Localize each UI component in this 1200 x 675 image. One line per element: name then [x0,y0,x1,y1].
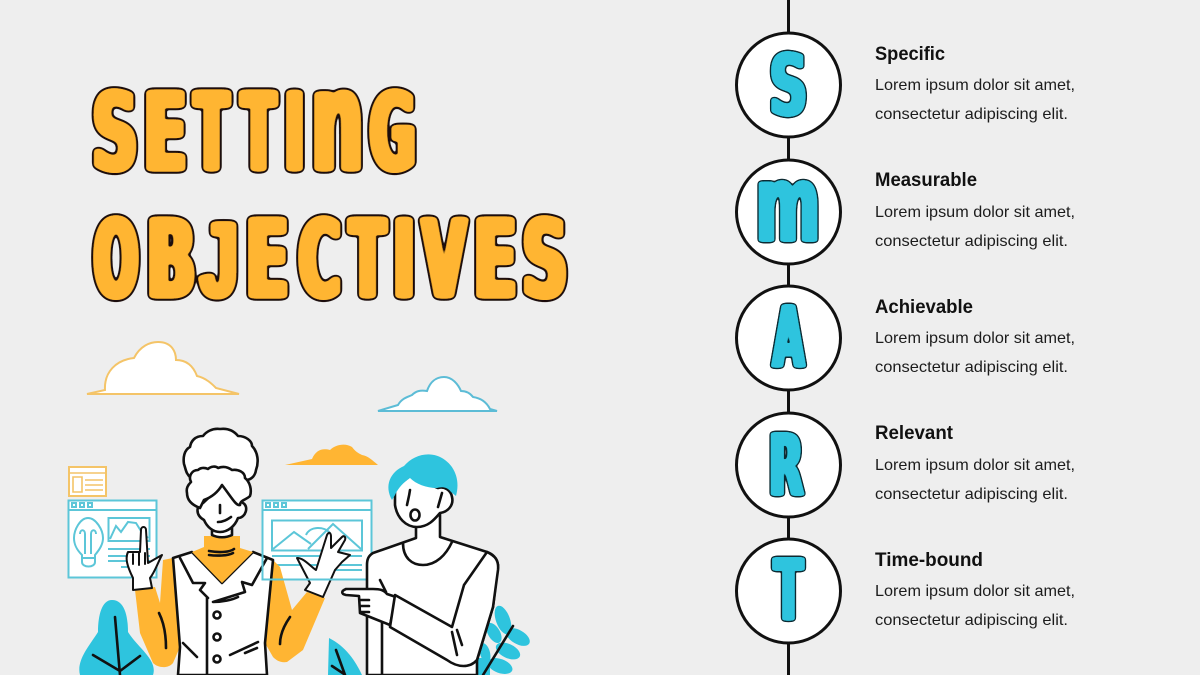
step: S: S [770,37,807,136]
title: S [93,71,137,196]
text block: Measurable: Lorem ipsum dolor sit amet, [875,204,1075,221]
text block: Time-bound: consectetur adipiscing elit. [875,612,1068,629]
man forearm [390,552,498,666]
woman right hand [297,533,350,597]
text block: Specific: Lorem ipsum dolor sit amet, [875,77,1075,94]
woman face [218,505,231,522]
text block: Specific [875,44,1075,123]
title: T [242,71,275,196]
text block: Specific: Specific [875,44,945,65]
text block: Time-bound: Time-bound [875,550,983,571]
text block: Relevant: Relevant [875,423,954,444]
woman vest [173,552,273,675]
title: T [195,71,228,196]
title: S [523,198,567,323]
man face [407,490,442,520]
window frame overlay [262,500,372,580]
cloud: blue outline [378,377,497,411]
woman head [198,485,246,537]
step: T [736,539,840,643]
text block: Time-bound: Lorem ipsum dolor sit amet, [875,583,1075,600]
text block: Achievable: consectetur adipiscing elit. [875,359,1068,376]
text block: Measurable: Measurable [875,170,977,191]
woman hair top [184,429,258,480]
man neckline [382,542,452,675]
man torso [367,512,498,675]
step: R [736,413,840,517]
plant: right fern [477,604,533,675]
title: n [312,40,363,204]
man hair [388,454,458,500]
text block: Relevant: Lorem ipsum dolor sit amet, [875,457,1075,474]
woman arms [135,558,325,667]
title: T [350,198,385,323]
title: G [370,71,415,196]
woman turtleneck [192,536,253,583]
title: J [200,199,237,320]
person: woman [127,429,350,675]
woman left hand [127,527,162,590]
text block: Time-bound [875,550,1075,629]
step: S [736,33,840,137]
cloud: solid orange [285,445,378,465]
title: E [144,71,186,196]
woman buttons [214,612,220,662]
step: A [736,286,840,390]
text block: Measurable [875,170,1075,250]
step: R: R [769,417,803,516]
woman hair bottom [187,467,251,508]
title [93,40,567,323]
text block: Relevant: consectetur adipiscing elit. [875,486,1068,503]
title: E [246,198,288,323]
person: man [342,454,498,675]
text block: Specific: consectetur adipiscing elit. [875,106,1068,123]
step: A: A [773,289,804,388]
text block: Achievable: Lorem ipsum dolor sit amet, [875,330,1075,347]
title: B [147,198,195,323]
text block: Relevant [875,423,1075,503]
cloud: yellow outline [87,342,239,394]
title: I [394,198,414,323]
text block: Achievable [875,297,1075,376]
text block: Achievable: Achievable [875,297,973,318]
title: C [299,198,340,323]
woman collar and details [159,549,290,675]
title: I [285,71,304,196]
step: T: T [774,542,803,641]
plant: small leaf [328,638,362,675]
title: O [94,198,138,323]
timeline line [787,0,790,675]
man head [395,476,452,527]
title: E [474,198,516,323]
man pointing hand [342,580,396,625]
icon: window with landscape [262,500,372,580]
icon: window with light bulb and chart [68,500,157,578]
text block: Measurable: consectetur adipiscing elit. [875,233,1068,250]
step: M: m [756,143,820,267]
plant: left blue bush [79,600,154,675]
step: M [736,143,840,267]
title: V [422,198,466,323]
icon: small orange window [69,467,106,496]
